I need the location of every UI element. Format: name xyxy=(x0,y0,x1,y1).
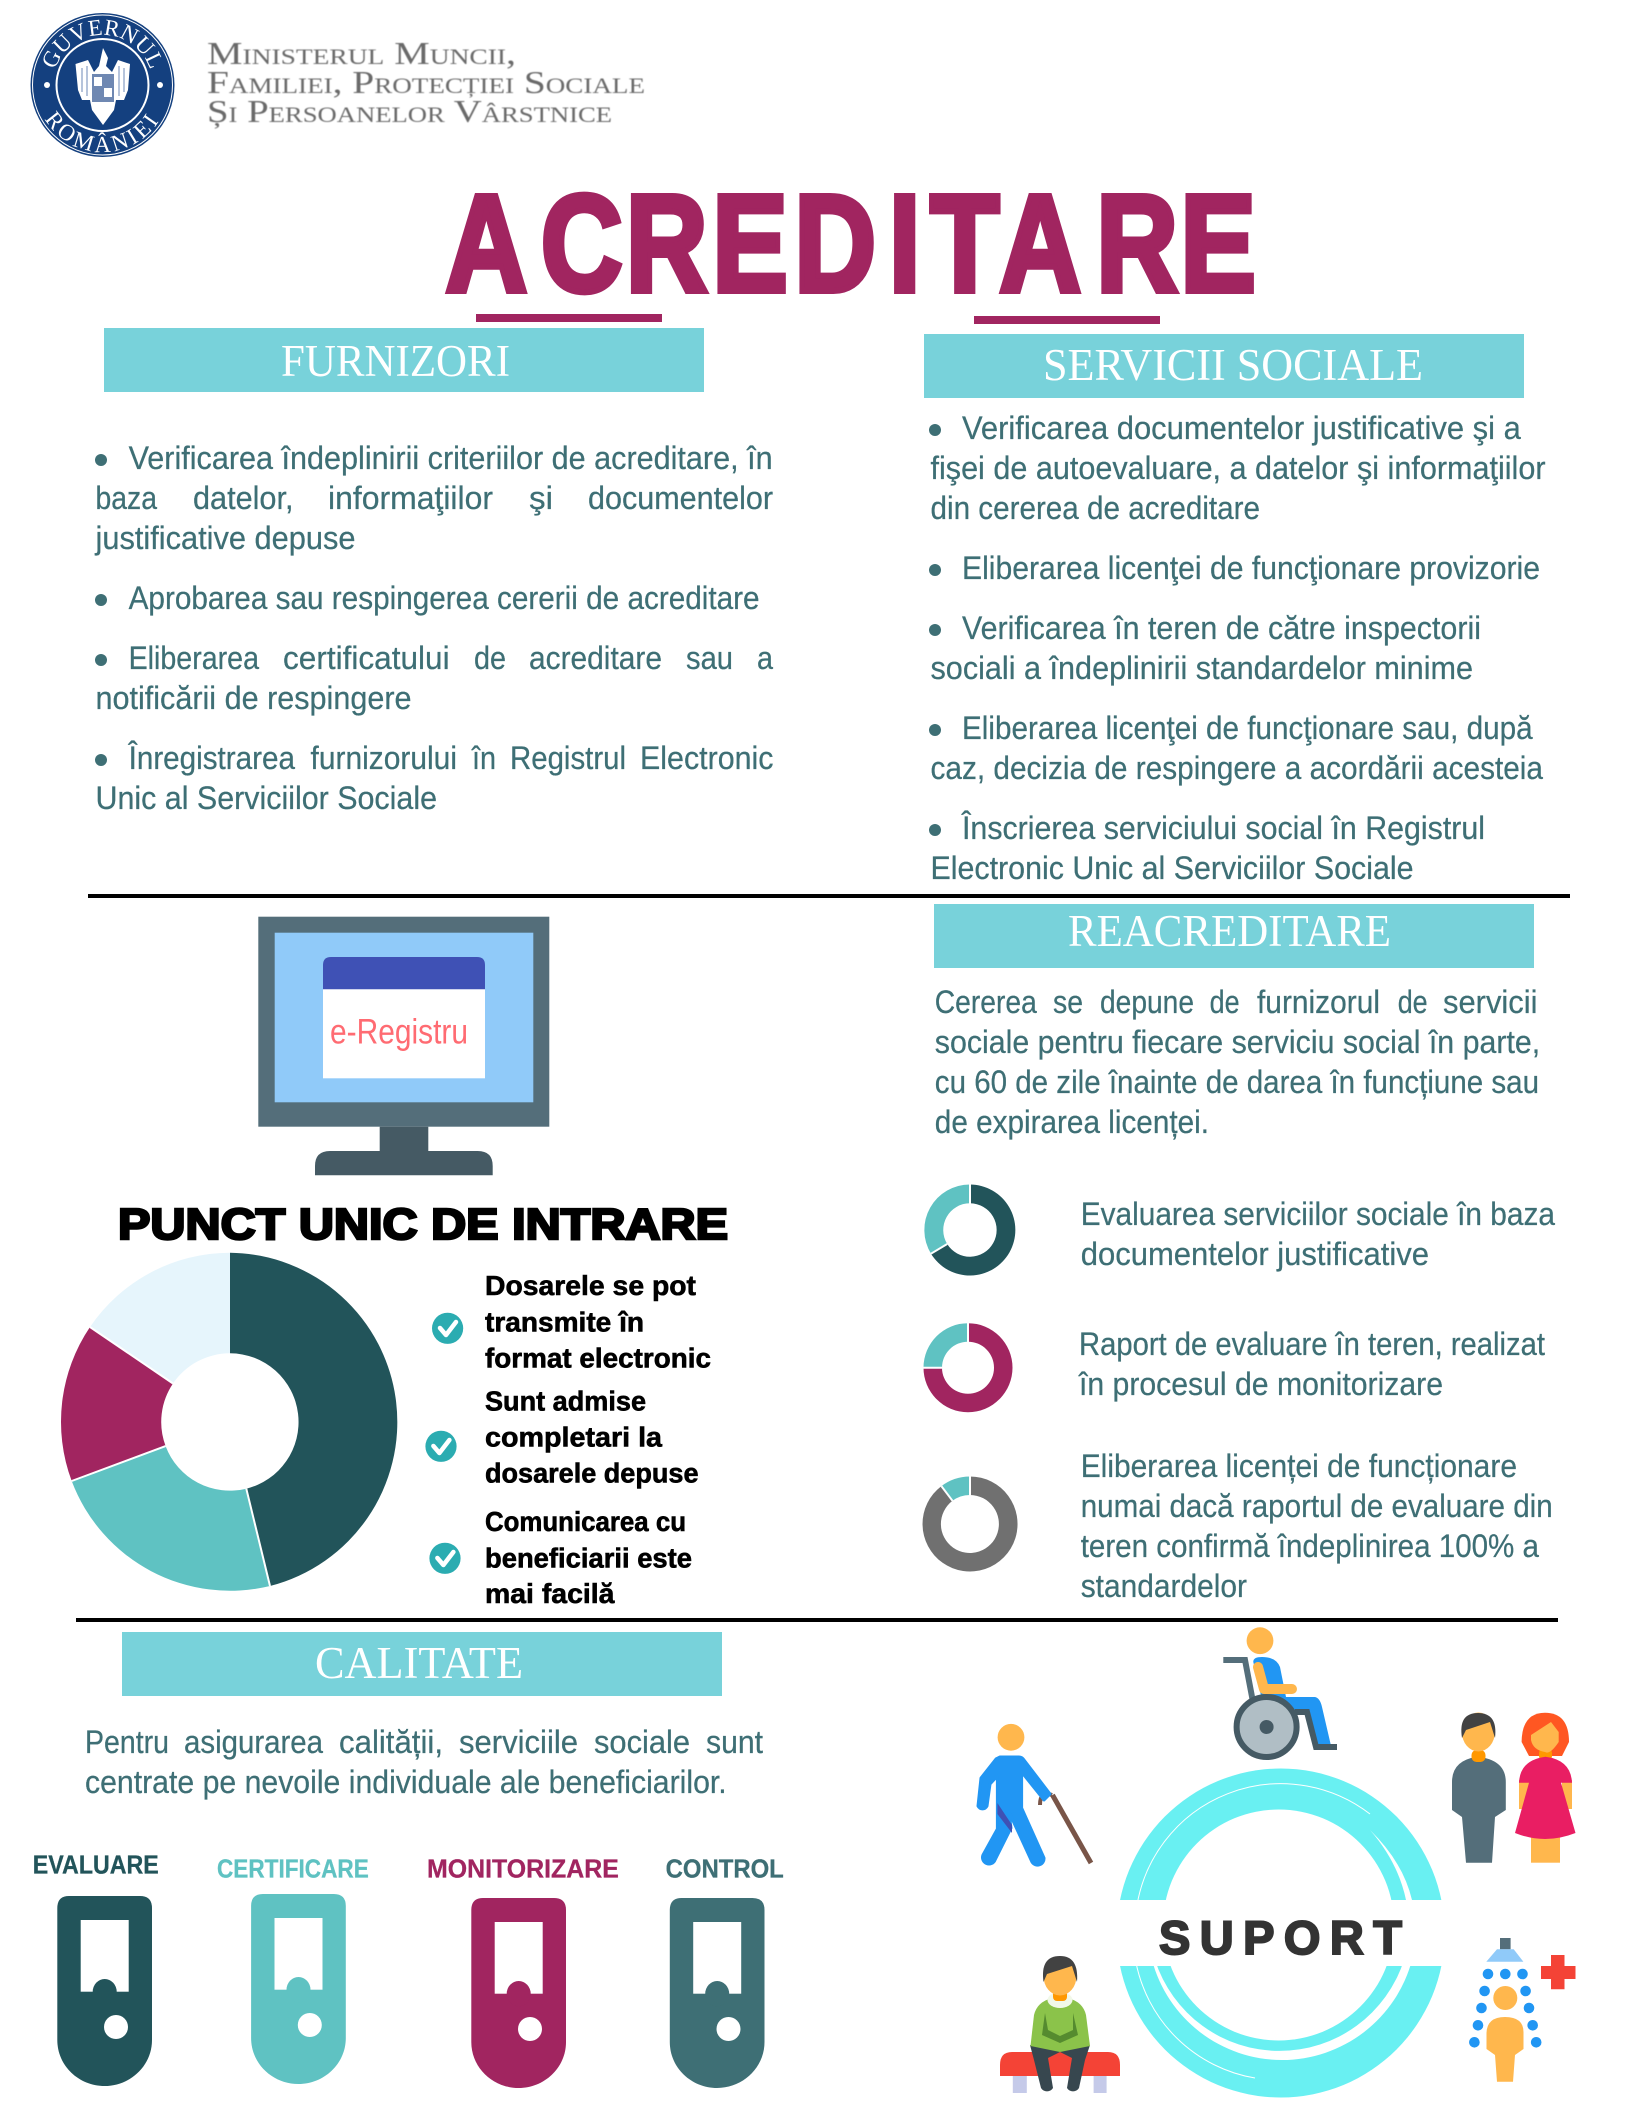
list: furnizori: Registrul xyxy=(510,740,626,776)
label: control: CONTROL xyxy=(666,1853,784,1883)
list: servicii sociale: Eliberarea licenţei de funcţionare sau, după xyxy=(962,710,1533,746)
logo: government seal: ROMÂNIEI xyxy=(44,110,158,152)
text: reacreditare: servicii xyxy=(1443,984,1538,1020)
text: calitate: sunt xyxy=(706,1724,763,1760)
text: calitate: sociale xyxy=(594,1724,690,1760)
text: eliberare: standardelor xyxy=(1081,1568,1247,1604)
heading: reacreditare xyxy=(934,904,1534,968)
text: calitate: centrate pe nevoile individuale ale beneficiarilor. xyxy=(85,1764,727,1800)
list: servicii sociale: Eliberarea licenţei de funcţionare provizorie xyxy=(962,550,1540,586)
list: servicii sociale: Electronic Unic al Serviciilor Sociale xyxy=(930,850,1414,886)
heading: reacreditare: REACREDITARE xyxy=(1068,906,1391,956)
text: eliberare: teren confirmă îndeplinirea 100% a xyxy=(1081,1528,1540,1564)
list: punct unic benefits xyxy=(425,1270,711,1609)
heading: calitate: CALITATE xyxy=(315,1638,523,1688)
logo: government seal xyxy=(30,13,174,157)
text: reacreditare: se xyxy=(1053,984,1083,1020)
list: furnizori: acreditare xyxy=(529,640,662,676)
list: servicii sociale: Verificarea în teren de către inspectorii xyxy=(962,610,1481,646)
text: reacreditare: depune xyxy=(1100,984,1194,1020)
icon: tube certificare xyxy=(251,1894,346,2084)
text: reacreditare: Cererea xyxy=(935,984,1038,1020)
list: furnizori: Aprobarea sau respingerea cererii de acreditare xyxy=(129,580,760,616)
heading: suport: SUPORT xyxy=(1159,1911,1402,1964)
list: servicii sociale xyxy=(929,410,1546,886)
list: servicii sociale: Verificarea documentelor justificative şi a xyxy=(962,410,1522,446)
panel: calitate xyxy=(85,1632,763,1800)
heading: furnizori xyxy=(104,328,704,392)
text: reacreditare: de expirarea licenței. xyxy=(935,1104,1209,1140)
text: raport: Raport de evaluare în teren, realizat xyxy=(1079,1326,1545,1362)
icon: check 2 xyxy=(425,1431,457,1462)
chart: donut xyxy=(61,1253,397,1591)
list: punct unic benefits: Dosarele se pot xyxy=(485,1270,696,1301)
list: punct unic benefits: transmite în xyxy=(485,1307,644,1338)
icon: check 3 xyxy=(429,1543,461,1574)
label: certificare: CERTIFICARE xyxy=(217,1853,369,1883)
list: furnizori: Unic al Serviciilor Sociale xyxy=(96,780,437,816)
list: servicii sociale: caz, decizia de respingere a acordării acesteia xyxy=(930,750,1544,786)
list: furnizori: notificării de respingere xyxy=(96,680,412,716)
panel: furnizori xyxy=(95,328,774,816)
list: punct unic benefits: beneficiarii este xyxy=(485,1542,692,1573)
heading: servicii sociale: SERVICII SOCIALE xyxy=(1043,340,1423,390)
text: raport: în procesul de monitorizare xyxy=(1078,1366,1443,1402)
icon: check 1 xyxy=(432,1313,463,1344)
logo: government seal: GUVERNUL xyxy=(44,20,162,68)
list: furnizori: Electronic xyxy=(640,740,774,776)
text: evaluare xyxy=(1081,1196,1556,1272)
list: furnizori: Eliberarea xyxy=(129,640,260,676)
text: calitate xyxy=(85,1724,763,1800)
list: furnizori: de xyxy=(474,640,506,676)
list: furnizori: Înregistrarea xyxy=(128,739,296,776)
panel: servicii sociale xyxy=(924,334,1546,886)
icon: seated person on bench xyxy=(1000,1956,1120,2093)
ministry name: Familiei, Protecției Sociale xyxy=(207,64,645,100)
list: punct unic benefits: mai facilă xyxy=(485,1578,615,1609)
chart: ring 2 xyxy=(923,1323,1012,1412)
list: furnizori: şi xyxy=(529,480,553,516)
ministry name: Și Persoanelor Vârstnice xyxy=(207,93,612,129)
text: reacreditare: sociale pentru fiecare serviciu social în parte, xyxy=(935,1024,1540,1060)
title accent bars xyxy=(476,314,1160,324)
icon: person with cane xyxy=(978,1724,1091,1865)
ministry name xyxy=(207,35,645,129)
text: reacreditare: cu 60 de zile înainte de darea în funcțiune sau xyxy=(935,1064,1539,1100)
heading: calitate xyxy=(122,1632,722,1696)
icon: computer monitor with e-Registru xyxy=(258,917,549,1175)
heading: servicii sociale xyxy=(924,334,1524,398)
list: servicii sociale: din cererea de acreditare xyxy=(930,490,1260,526)
text: evaluare: documentelor justificative xyxy=(1081,1236,1429,1272)
list: punct unic benefits: completari la xyxy=(485,1422,662,1453)
text: reacreditare: furnizorul xyxy=(1257,984,1380,1020)
list: furnizori: informaţiilor xyxy=(328,480,493,516)
text: evaluare: Evaluarea serviciilor sociale în baza xyxy=(1081,1196,1556,1232)
icon: man and woman xyxy=(1452,1712,1576,1863)
icon: shower and medical cross xyxy=(1469,1938,1576,2082)
text: eliberare: Eliberarea licenței de funcționare xyxy=(1081,1448,1517,1484)
icon: tube control xyxy=(670,1898,764,2088)
icon: computer monitor with e-Registru: e-Registru xyxy=(330,1012,468,1051)
list: punct unic benefits: Sunt admise xyxy=(485,1386,646,1417)
support ring xyxy=(1100,1768,1460,2098)
list: servicii sociale: sociali a îndeplinirii standardelor minime xyxy=(930,650,1473,686)
chart: ring 3 xyxy=(923,1476,1018,1572)
text: calitate: calității, xyxy=(339,1724,443,1760)
text: reacreditare: de xyxy=(1210,984,1240,1020)
text: reacreditare xyxy=(935,984,1540,1140)
list: servicii sociale: Înscrierea serviciului social în Registrul xyxy=(961,809,1485,846)
list: furnizori: certificatului xyxy=(283,640,450,676)
text: eliberare: numai dacă raportul de evaluare din xyxy=(1081,1488,1553,1524)
icon: tube evaluare xyxy=(57,1896,152,2086)
list: servicii sociale: fişei de autoevaluare, a datelor şi informaţiilor xyxy=(930,450,1546,486)
list: furnizori: a xyxy=(757,640,774,676)
icon: tube monitorizare xyxy=(471,1898,566,2088)
list: punct unic benefits: dosarele depuse xyxy=(485,1458,698,1489)
list: furnizori: furnizorului xyxy=(310,740,457,776)
label: monitorizare: MONITORIZARE xyxy=(427,1853,619,1883)
heading: punct unic de intrare: PUNCT UNIC DE INTRARE xyxy=(118,1200,728,1249)
chart: ring 1 xyxy=(924,1184,1015,1275)
text: eliberare xyxy=(1081,1448,1553,1604)
list: furnizori: baza xyxy=(96,480,158,516)
text: calitate: serviciile xyxy=(459,1724,578,1760)
panel: reacreditare xyxy=(934,904,1540,1140)
list: furnizori: justificative depuse xyxy=(95,520,356,556)
title: ACREDITARE xyxy=(446,166,1256,321)
list: punct unic benefits: Comunicarea cu xyxy=(485,1506,686,1537)
heading: furnizori: FURNIZORI xyxy=(281,336,510,386)
list: furnizori: datelor, xyxy=(193,480,294,516)
text: reacreditare: de xyxy=(1398,984,1428,1020)
list: punct unic benefits: format electronic xyxy=(485,1343,711,1374)
ministry name: Ministerul Muncii, xyxy=(207,35,516,71)
list: furnizori: în xyxy=(471,740,496,776)
text: raport xyxy=(1078,1326,1545,1402)
list: furnizori xyxy=(95,440,774,816)
text: calitate: Pentru xyxy=(85,1724,169,1760)
icon: person in wheelchair xyxy=(1223,1627,1337,1757)
list: furnizori: sau xyxy=(686,640,733,676)
label: evaluare: EVALUARE xyxy=(33,1849,159,1879)
list: furnizori: Verificarea îndeplinirii criteriilor de acreditare, în xyxy=(129,440,773,476)
list: furnizori: documentelor xyxy=(588,480,773,516)
text: calitate: asigurarea xyxy=(184,1724,324,1760)
